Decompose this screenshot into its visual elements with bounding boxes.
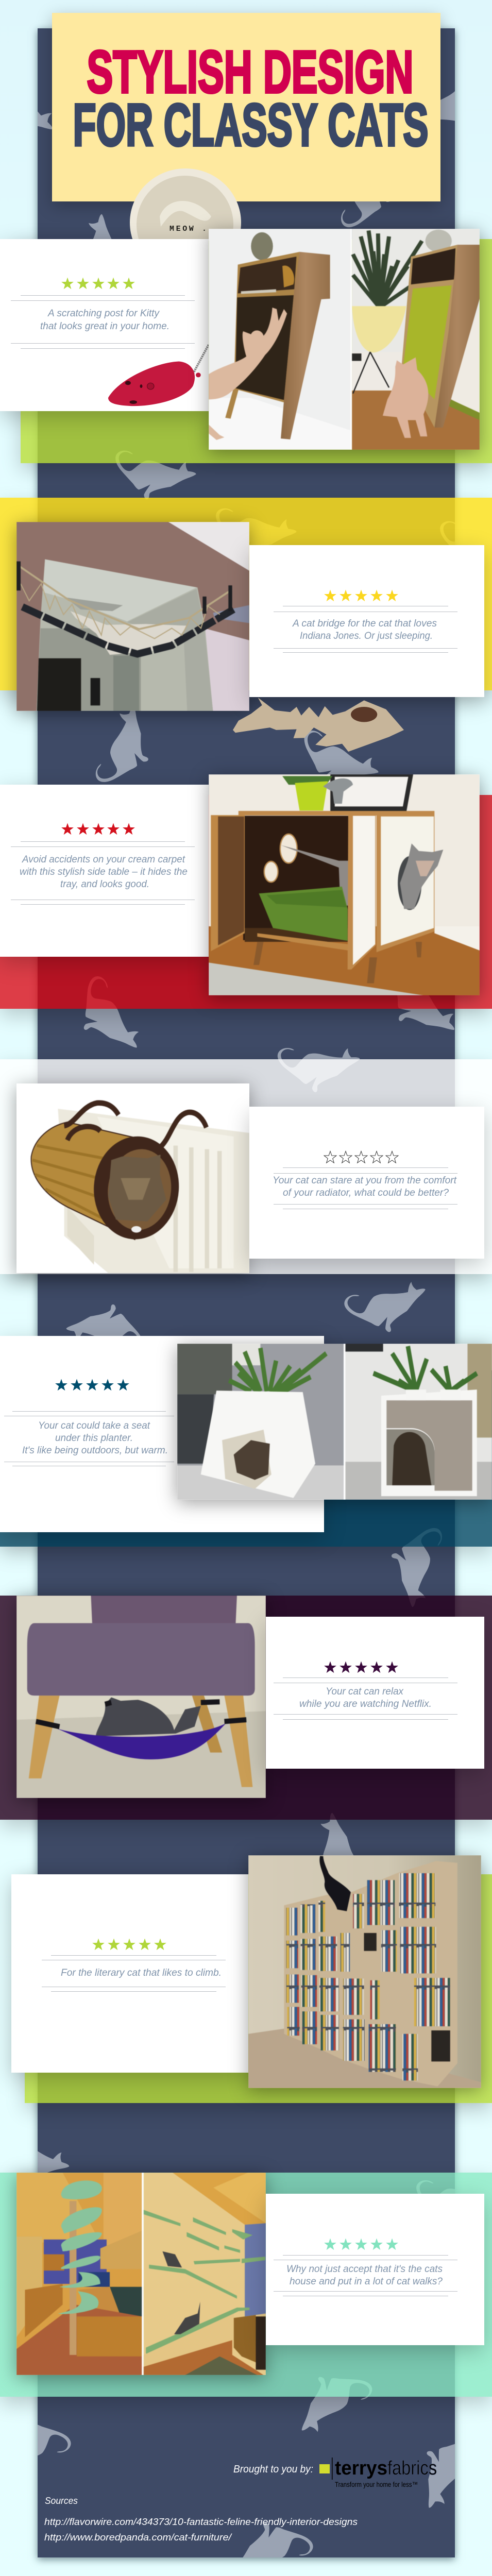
logo: terrysfabrics: Transform your home for less™ (335, 2480, 418, 2488)
photo: radiator cat bed (16, 1083, 249, 1273)
photo: cat rope bridge (16, 522, 249, 711)
caption text: A scratching post for Kitty (47, 308, 160, 319)
panel: cat walks caption card (266, 2194, 484, 2345)
caption text: that looks great in your home. (40, 321, 169, 332)
caption text: house and put in a lot of cat walks? (290, 2276, 443, 2287)
caption text (299, 1686, 432, 1709)
caption text: tray, and looks good. (60, 879, 149, 890)
icon: red toy mouse (108, 344, 209, 406)
band: white behind radiator bed (0, 1059, 492, 1274)
panel: planter caption card (0, 1336, 324, 1532)
caption text: while you are watching Netflix. (299, 1699, 432, 1709)
band: red behind side table (0, 795, 492, 1009)
band: teal behind planter (0, 1370, 492, 1547)
rating stars (55, 1379, 129, 1391)
rating stars (324, 589, 398, 601)
caption text (292, 618, 437, 641)
rating stars (324, 1661, 398, 1673)
caption text: A cat bridge for the cat that loves (292, 618, 437, 629)
caption text: Avoid accidents on your cream carpet (22, 854, 185, 865)
caption text (20, 854, 188, 890)
rating stars (61, 823, 135, 835)
photo: chair hammock (16, 1596, 266, 1798)
rating stars (92, 1938, 166, 1950)
photo: litter tray side table (209, 774, 480, 995)
caption text: Your cat can stare at you from the comfort (273, 1175, 457, 1186)
logo: terrysfabrics: fabrics (387, 2458, 437, 2479)
panel: cat bridge caption card (249, 545, 484, 697)
band: purple behind hammock (0, 1596, 492, 1820)
footer: credits and sources (44, 2458, 437, 2543)
title panel (52, 13, 440, 201)
logo: terrysfabrics: terrys (335, 2458, 387, 2479)
source link 2: http://www.boredpanda.com/cat-furniture/ (44, 2532, 232, 2543)
band: yellow behind cat bridge (0, 498, 492, 690)
photo: cat walks home (16, 2173, 266, 2375)
caption text (286, 2264, 443, 2287)
panel: radiator caption card (249, 1107, 484, 1259)
caption text: Indiana Jones. Or just sleeping. (300, 631, 433, 641)
panel: hammock caption card (266, 1617, 484, 1769)
rating stars, outlined (324, 1151, 398, 1163)
icon: fish bone rug (233, 698, 404, 752)
logo: terrysfabrics (319, 2458, 437, 2488)
band: mint behind cat walks (0, 2173, 492, 2397)
caption text: For the literary cat that likes to climb. (61, 1968, 222, 1978)
rating stars (61, 277, 135, 289)
caption text: with this stylish side table – it hides the (20, 867, 188, 877)
panel: bookcase caption card (11, 1874, 248, 2073)
caption text: It's like being outdoors, but warm. (22, 1445, 168, 1456)
panel: scratching post caption card (0, 239, 209, 411)
caption text: under this planter. (55, 1433, 133, 1444)
source link 1: http://flavorwire.com/434373/10-fantastic-feline-friendly-interior-designs (44, 2517, 358, 2527)
photo: cat scratching post, two views (209, 229, 480, 450)
caption text: Your cat could take a seat (38, 1420, 150, 1431)
band: green behind scratching post (21, 239, 492, 463)
photo: bookcase with cat steps (248, 1855, 481, 2088)
caption text: Why not just accept that it's the cats (286, 2264, 443, 2275)
sources heading: Sources (45, 2496, 78, 2506)
photo: planter cat houses (177, 1344, 492, 1500)
band: green behind bookcase (25, 1874, 492, 2103)
caption text (22, 1420, 168, 1456)
caption text: of your radiator, what could be better? (283, 1188, 449, 1198)
panel: side table caption card (0, 785, 209, 957)
icon: MEOW food bowl (130, 168, 241, 241)
icon: MEOW food bowl: MEOW . (169, 225, 207, 233)
brought to you by: Brought to you by: (233, 2464, 313, 2475)
caption text: Your cat can relax (326, 1686, 404, 1697)
rating stars (324, 2238, 398, 2250)
caption text (273, 1175, 457, 1198)
caption text (40, 308, 169, 332)
